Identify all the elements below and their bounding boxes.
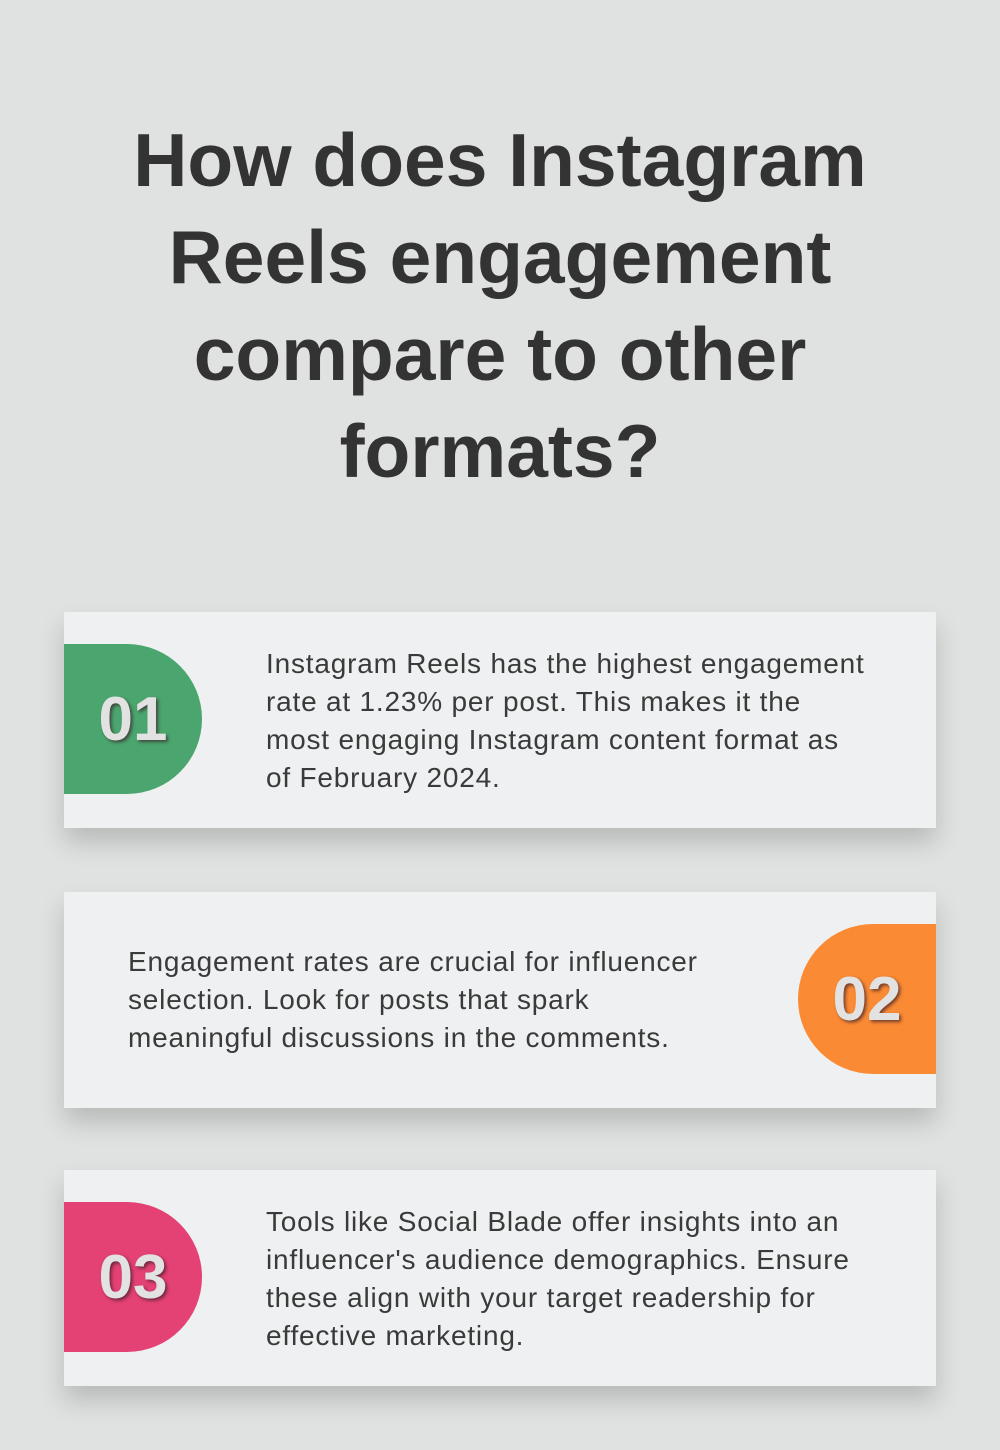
- badge 02: [798, 924, 936, 1074]
- text 1: Instagram Reels has the highest engagement: [266, 648, 865, 679]
- text 2: Engagement rates are crucial for influencer: [128, 946, 698, 977]
- badge 03: 03: [99, 1242, 167, 1312]
- text 3: these align with your target readership for: [266, 1282, 816, 1313]
- text 3: Tools like Social Blade offer insights into an: [266, 1206, 839, 1237]
- card 3: [64, 1170, 936, 1386]
- badge 01: [64, 644, 202, 794]
- text 2: meaningful discussions in the comments.: [128, 1022, 670, 1053]
- badge 01: 01: [99, 684, 167, 754]
- text 2: selection. Look for posts that spark: [128, 984, 589, 1015]
- text 3: effective marketing.: [266, 1320, 524, 1351]
- badge 03: [64, 1202, 202, 1352]
- title: compare to other: [194, 312, 806, 396]
- badge 02: 02: [833, 964, 901, 1034]
- text 1: most engaging Instagram content format as: [266, 724, 839, 755]
- text 1: of February 2024.: [266, 762, 501, 793]
- text 3: influencer's audience demographics. Ensure: [266, 1244, 850, 1275]
- title: Reels engagement: [169, 215, 831, 299]
- card 1: [64, 612, 936, 828]
- text 3: [266, 1206, 850, 1351]
- text 2: [128, 946, 698, 1053]
- text 1: [266, 648, 865, 793]
- card 2: [64, 892, 936, 1108]
- text 1: rate at 1.23% per post. This makes it the: [266, 686, 801, 717]
- title: formats?: [340, 409, 660, 493]
- title: [133, 118, 867, 493]
- title: How does Instagram: [133, 118, 867, 202]
